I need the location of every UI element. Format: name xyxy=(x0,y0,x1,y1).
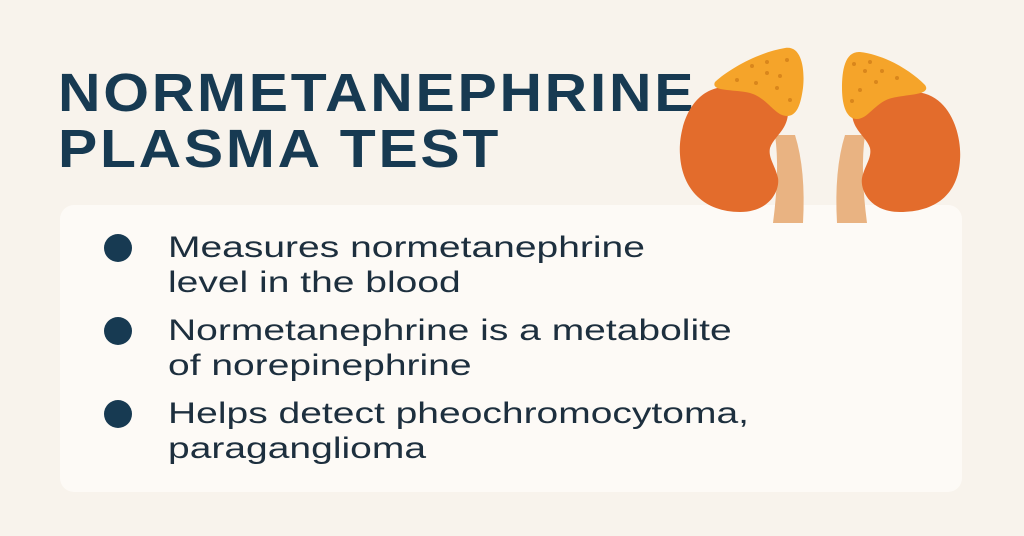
text xyxy=(168,314,732,382)
text: Measures normetanephrine xyxy=(168,231,645,264)
title xyxy=(58,63,696,179)
text xyxy=(168,397,749,465)
bullet dot xyxy=(104,234,132,262)
bullet 2 xyxy=(104,314,732,382)
text: paraganglioma xyxy=(168,432,426,465)
title line 2: PLASMA TEST xyxy=(58,119,501,179)
bullet dot xyxy=(104,400,132,428)
text: Helps detect pheochromocytoma, xyxy=(168,397,749,430)
text: level in the blood xyxy=(168,266,461,299)
text xyxy=(168,231,645,299)
bullet dot xyxy=(104,317,132,345)
bullet 3 xyxy=(104,397,749,465)
icon: kidneys with adrenal glands xyxy=(680,48,960,223)
bullet 1 xyxy=(104,231,645,299)
text: of norepinephrine xyxy=(168,349,472,382)
title line 1: NORMETANEPHRINE xyxy=(58,63,696,123)
panel: facts xyxy=(60,205,962,492)
text: Normetanephrine is a metabolite xyxy=(168,314,732,347)
